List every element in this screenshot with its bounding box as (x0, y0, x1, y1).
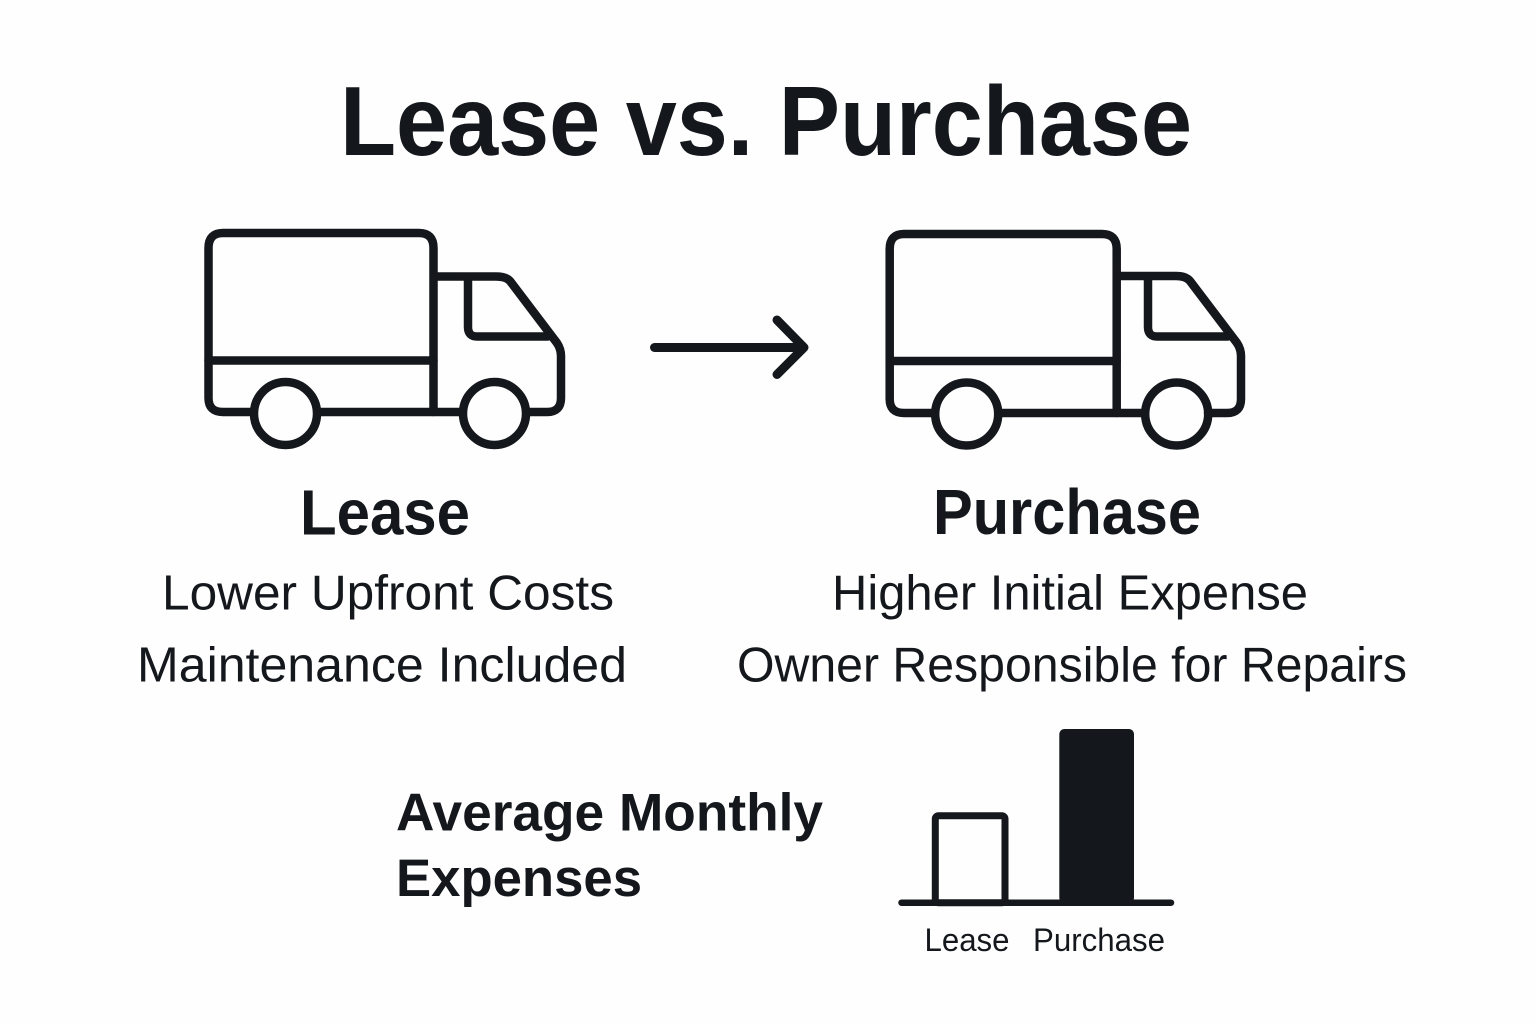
heading: average monthly expenses: Average Monthly (396, 784, 824, 842)
arrow (654, 320, 804, 374)
bar chart (902, 729, 1171, 958)
label: purchase: Purchase (1033, 922, 1165, 958)
text: purchase points (737, 566, 1407, 692)
heading: lease: Lease (300, 476, 470, 548)
chart axis (902, 899, 1171, 906)
text: lease points: Lower Upfront Costs (162, 566, 614, 620)
title: Lease vs. Purchase (340, 66, 1192, 176)
bar: lease (935, 816, 1005, 903)
heading: average monthly expenses (396, 784, 824, 908)
text: purchase points: Higher Initial Expense (832, 566, 1308, 620)
icon: purchase truck (890, 234, 1241, 446)
text: lease points (137, 566, 627, 692)
icon: lease truck (208, 233, 561, 445)
text: lease points: Maintenance Included (137, 638, 627, 692)
bar: purchase (1059, 729, 1134, 903)
text: purchase points: Owner Responsible for Repairs (737, 638, 1407, 692)
heading: average monthly expenses: Expenses (396, 849, 642, 908)
heading: purchase: Purchase (933, 476, 1201, 548)
label: lease: Lease (924, 922, 1010, 958)
